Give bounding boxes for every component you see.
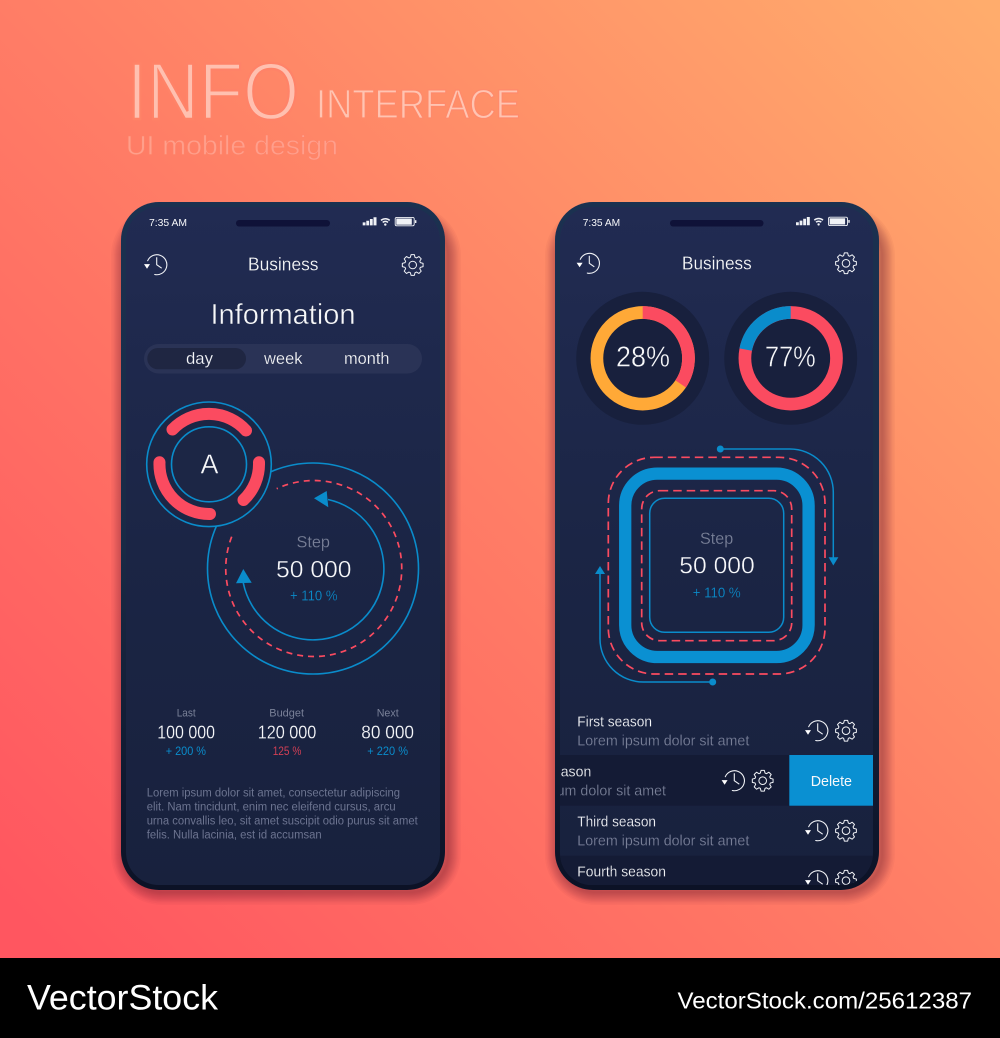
phone body [555, 202, 879, 890]
stat: next: Next [377, 708, 399, 720]
description text: elit. Nam tincidunt, enim nec eleifend cursus, arcu [147, 802, 396, 814]
thick blue frame [625, 474, 809, 657]
delete button [789, 755, 873, 806]
footer url: VectorStock.com/25612387 [678, 988, 972, 1014]
subtitle: UI mobile design [126, 130, 338, 160]
tab: month: month [344, 349, 390, 368]
stat: budget: 125 % [273, 744, 302, 758]
icon: history clock [144, 255, 167, 275]
stat: budget: Budget [269, 708, 304, 720]
description text: felis. Nulla lacinia, est id accumsan [147, 830, 322, 842]
active tab [147, 348, 246, 369]
row: second season swiped: Second season [494, 764, 591, 780]
status icons [363, 217, 416, 226]
phone screen [560, 207, 873, 885]
phone body [121, 202, 445, 890]
row: first season [577, 714, 856, 749]
donut chart: 28% [576, 292, 709, 425]
phone screen [126, 207, 440, 885]
season list [560, 716, 873, 885]
top arrow [717, 446, 838, 566]
step value: 50 000 [679, 552, 755, 579]
icon: settings gear [836, 253, 856, 274]
stat: last: Last [177, 708, 196, 720]
stat: next: 80 000 [361, 723, 414, 743]
row: third season: Third season [577, 814, 656, 830]
stat: last: 100 000 [157, 723, 215, 743]
description text [147, 788, 418, 842]
row: first season: Lorem ipsum dolor sit amet [577, 733, 749, 749]
row: second season swiped: Lorem ipsum dolor sit amet [494, 783, 666, 799]
circular step chart [208, 463, 418, 674]
description text: urna convallis leo, sit amet suscipit odio purus sit amet [147, 816, 418, 828]
stat: budget [258, 708, 316, 758]
screen heading: Business [682, 252, 752, 273]
notch [670, 220, 764, 226]
clock time: 7:35 AM [149, 217, 187, 229]
stat: next [361, 708, 414, 758]
panel: left phone [121, 202, 445, 890]
step label: Step [296, 532, 330, 551]
square step chart [595, 446, 838, 686]
row: fourth season: Fourth season [577, 864, 666, 880]
avatar ring [147, 402, 271, 527]
dashed outer frame [608, 457, 825, 674]
row: second season swiped [560, 755, 873, 806]
title block [126, 47, 520, 160]
panel: right phone [555, 202, 879, 890]
row: first season: First season [577, 714, 652, 730]
stat: last [157, 708, 215, 758]
tab: week: week [263, 349, 303, 368]
clock time: 7:35 AM [583, 217, 620, 229]
inner arc with arrows [236, 491, 384, 640]
inner frame [650, 498, 784, 632]
screen heading: Business [248, 254, 318, 275]
donut chart: 77% [724, 292, 857, 425]
tab track [144, 344, 422, 374]
dashed red progress ring [226, 481, 402, 657]
bottom arrow [595, 566, 716, 686]
value: 28% [616, 342, 670, 374]
stat: last: + 200 % [166, 744, 206, 758]
title: INTERFACE: INTERFACE [316, 81, 520, 127]
icon: history clock [577, 253, 599, 273]
period tabs [144, 344, 422, 374]
delete label: Delete [811, 773, 852, 790]
step change: + 110 % [290, 588, 338, 605]
stat: next: + 220 % [367, 744, 408, 758]
phone shadows [124, 218, 882, 892]
footer logo: VectorStock [27, 978, 219, 1017]
title: INFO: INFO [127, 47, 299, 137]
description text: Lorem ipsum dolor sit amet, consectetur adipiscing [147, 788, 400, 800]
outer ring [208, 463, 418, 674]
icon: settings gear [402, 255, 423, 275]
heading: Information: Information [210, 299, 356, 331]
value: 77% [765, 342, 816, 374]
step label: Step [700, 529, 733, 548]
stat: budget: 120 000 [258, 723, 316, 743]
dashed inner frame [642, 491, 792, 641]
step value: 50 000 [276, 556, 352, 583]
footer bar [0, 958, 1000, 1038]
row: fourth season [560, 856, 872, 885]
row: third season: Lorem ipsum dolor sit amet [577, 833, 749, 849]
avatar letter: A [200, 448, 219, 479]
tab: day: day [186, 349, 213, 368]
notch [236, 220, 330, 226]
step change: + 110 % [693, 584, 741, 601]
row: third season [577, 814, 856, 849]
status icons [796, 217, 850, 226]
